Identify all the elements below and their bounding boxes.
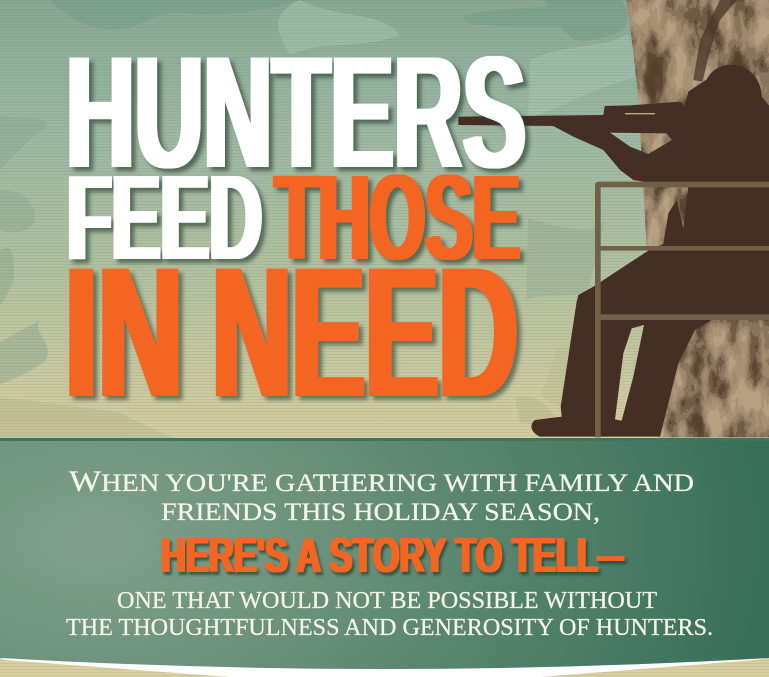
camouflage background — [0, 0, 769, 440]
intro text — [69, 465, 694, 526]
closing text: THE THOUGHTFULNESS AND GENEROSITY OF HUNTERS. — [66, 615, 713, 641]
green panel — [0, 438, 769, 669]
closing text — [66, 588, 713, 641]
tree stand rail — [595, 182, 769, 437]
tree trunk — [620, 0, 769, 440]
intro text: WHEN YOU'RE GATHERING WITH FAMILY AND — [69, 465, 694, 498]
title — [65, 22, 526, 437]
highlighted line: — — [598, 529, 623, 583]
title word: NEED: NEED — [212, 227, 518, 437]
rifle scope highlight — [625, 112, 655, 116]
hunter silhouette with rifle — [458, 65, 769, 437]
title word: FEED: FEED — [67, 150, 262, 287]
highlighted line: HERE'S A STORY TO TELL — [161, 529, 598, 583]
title word: THOSE: THOSE — [275, 150, 520, 287]
bottom ribbon strip — [0, 655, 769, 677]
title word: IN: IN — [65, 227, 183, 437]
closing text: ONE THAT WOULD NOT BE POSSIBLE WITHOUT — [117, 588, 657, 614]
intro text: FRIENDS THIS HOLIDAY SEASON, — [161, 499, 600, 526]
